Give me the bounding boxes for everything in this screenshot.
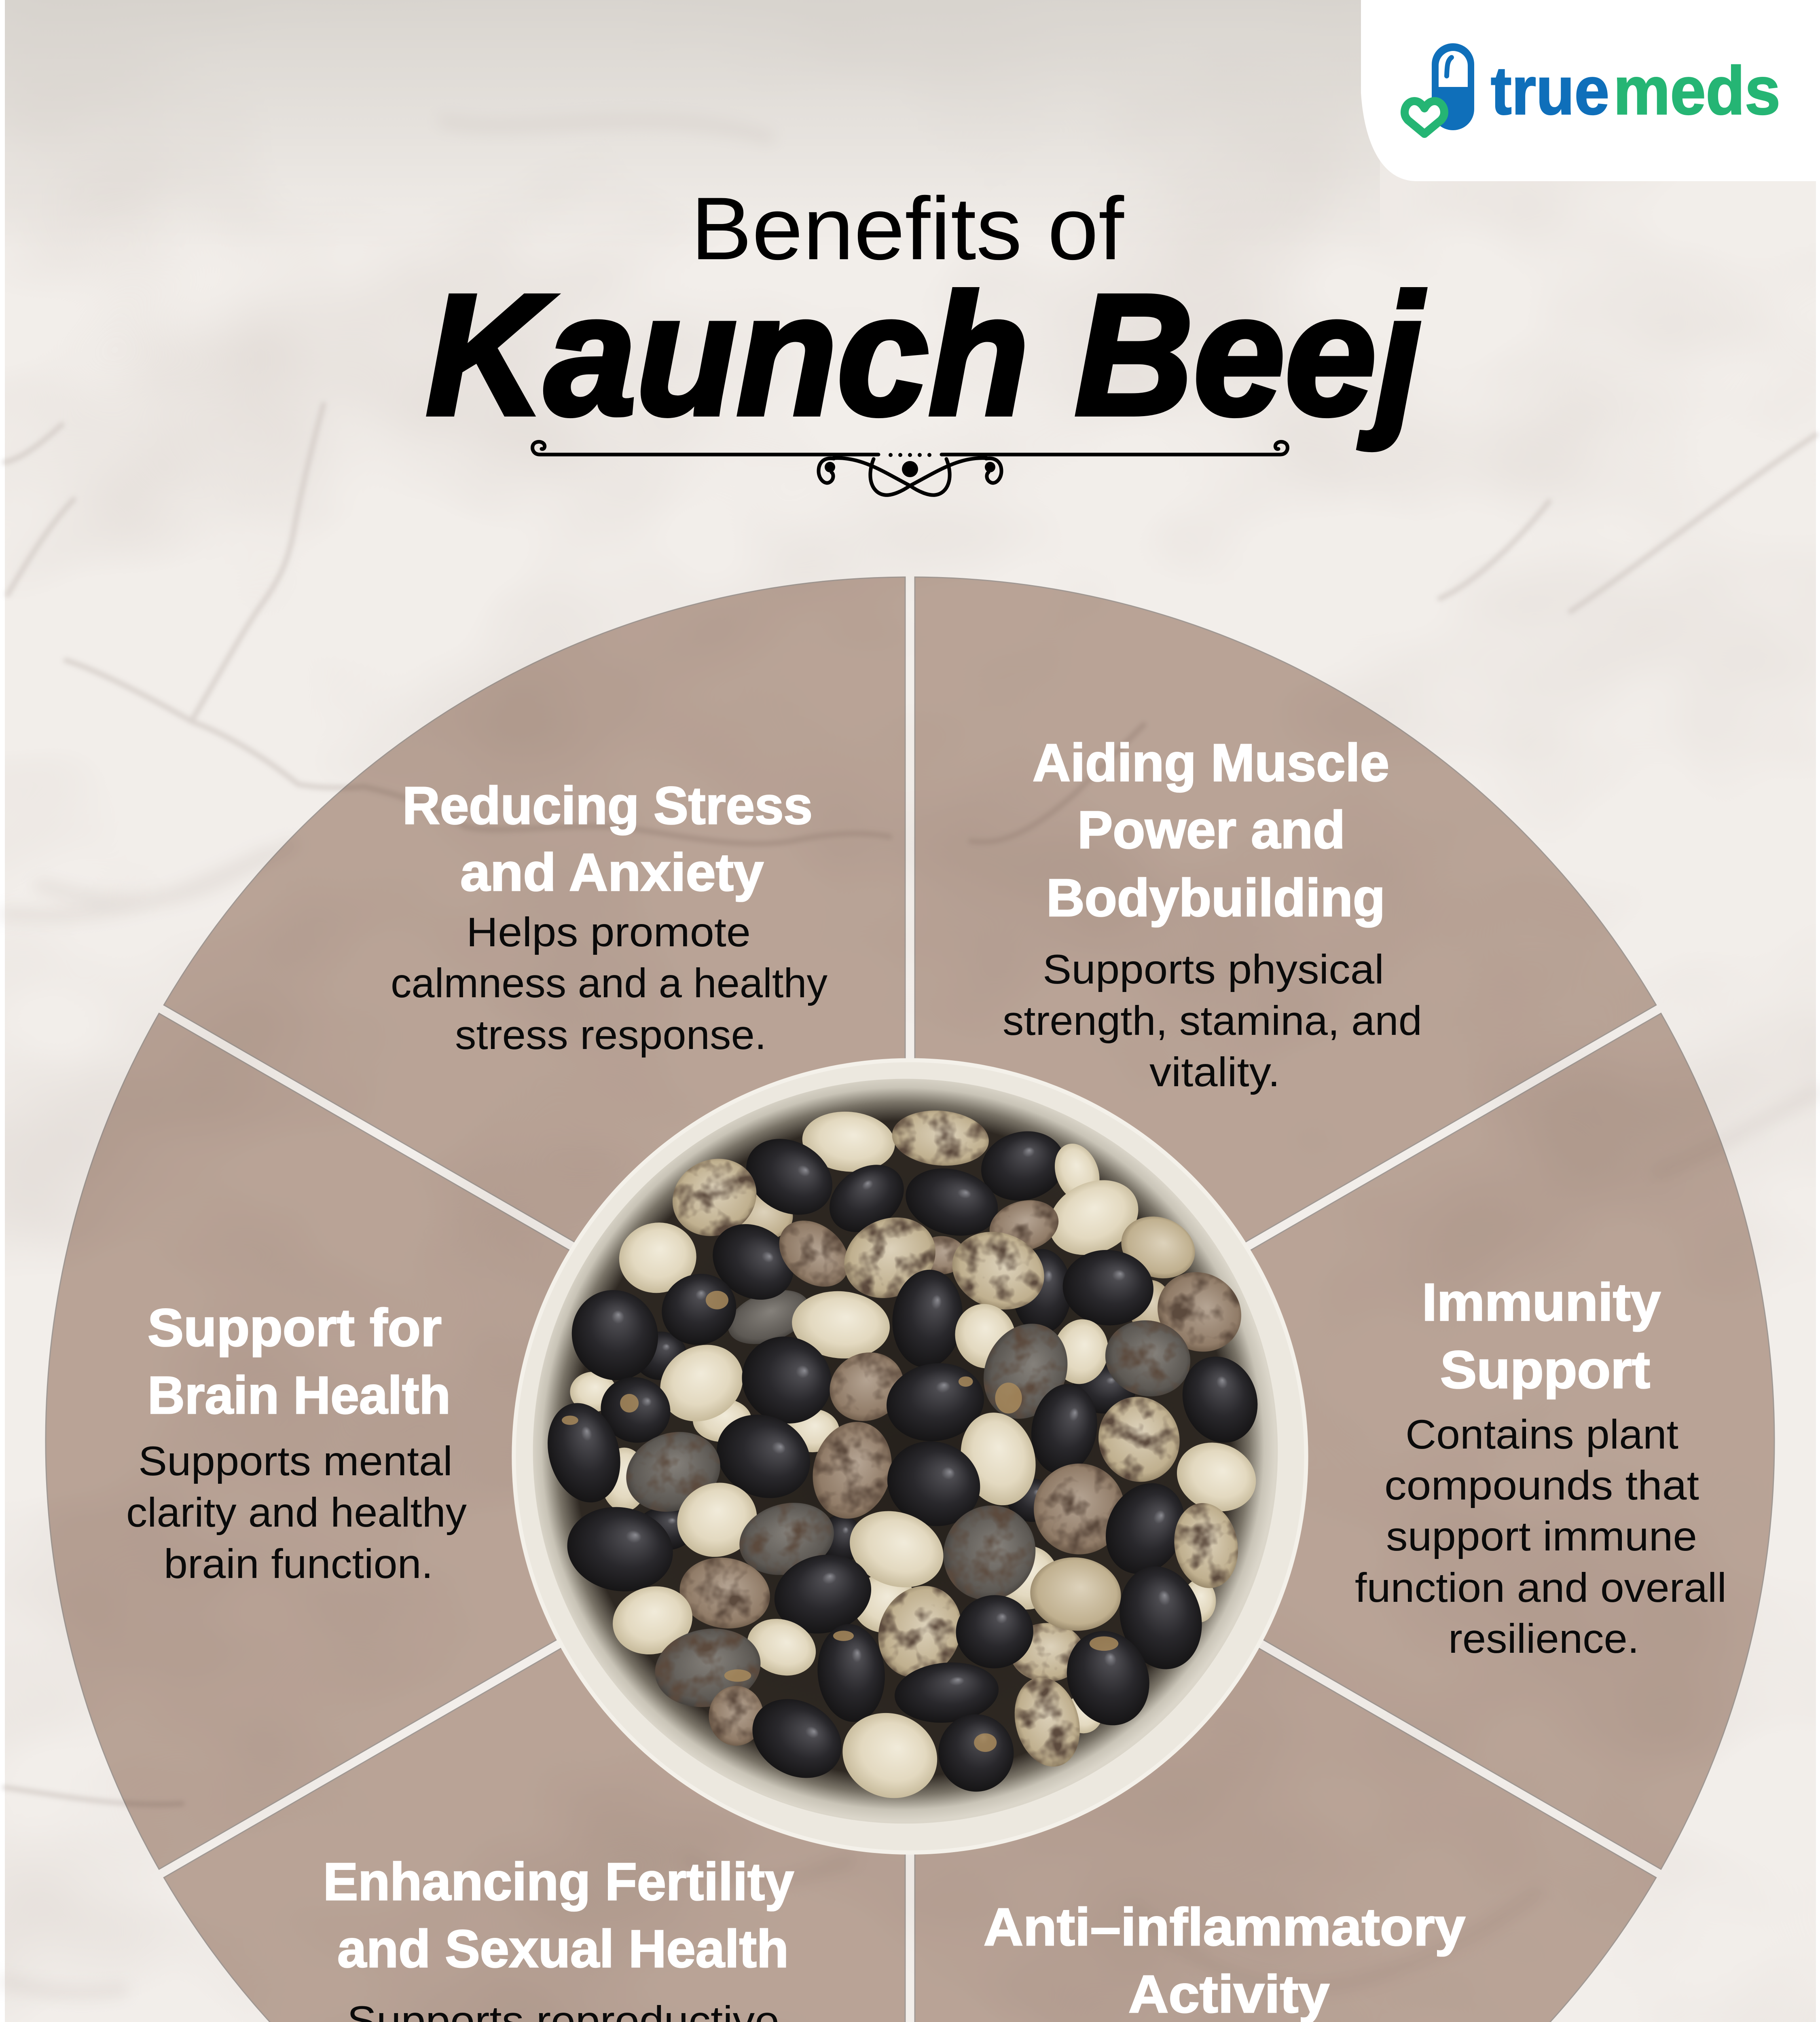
logo wordmark — [1491, 53, 1780, 129]
text: immunity support — [1355, 1272, 1727, 1662]
sector: top right — [915, 577, 1656, 1433]
text: immunity support: Immunity — [1422, 1272, 1661, 1332]
text: immunity support: function and overall — [1355, 1565, 1727, 1611]
wheel of six sectors — [46, 577, 1774, 2022]
text: reducing stress: Reducing Stress — [402, 776, 813, 835]
beans, back layer — [570, 1192, 1216, 1733]
text: fertility: Enhancing Fertility — [323, 1852, 794, 1911]
sector: top left — [164, 577, 905, 1433]
text: anti-inflammatory — [984, 1897, 1465, 2022]
title: Benefits of — [691, 179, 1124, 278]
text: brain health: clarity and healthy — [126, 1489, 467, 1536]
logo wordmark: meds — [1613, 53, 1780, 129]
text: anti-inflammatory: Anti–inflammatory — [984, 1897, 1465, 1956]
text: immunity support: Contains plant — [1405, 1411, 1678, 1457]
text: brain health — [126, 1298, 467, 1587]
text: reducing stress — [391, 776, 827, 1058]
text: aiding muscle power: vitality. — [1149, 1049, 1280, 1095]
text: immunity support: compounds that — [1384, 1462, 1699, 1508]
text: reducing stress: calmness and a healthy — [391, 960, 827, 1006]
sector: bottom right — [915, 1450, 1656, 2022]
text: reducing stress: stress response. — [455, 1012, 766, 1058]
text: aiding muscle power: Power and — [1077, 800, 1345, 859]
sector: right — [920, 1013, 1774, 1869]
bowl of beans — [513, 1059, 1307, 1853]
sector: bottom left — [164, 1450, 905, 2022]
text: immunity support: Support — [1440, 1340, 1650, 1399]
text: anti-inflammatory: Activity — [1128, 1964, 1329, 2022]
text: aiding muscle power: Aiding Muscle — [1033, 733, 1389, 792]
logo wordmark: true — [1491, 53, 1609, 129]
text: brain health: brain function. — [164, 1541, 433, 1587]
tan patches on dark beans — [562, 1291, 1118, 1752]
title — [426, 179, 1425, 452]
text: aiding muscle power: Supports physical — [1043, 946, 1384, 992]
text: fertility: and Sexual Health — [337, 1919, 789, 1978]
text: immunity support: support immune — [1386, 1513, 1697, 1559]
sector: left — [46, 1013, 900, 1869]
text: immunity support: resilience. — [1448, 1616, 1639, 1662]
panel: logo card — [1361, 0, 1820, 181]
title: Kaunch Beej — [426, 259, 1425, 452]
text: brain health: Brain Health — [148, 1365, 451, 1425]
text: brain health: Support for — [148, 1298, 442, 1357]
ornament divider — [533, 442, 1287, 495]
beans, front layer — [537, 1106, 1270, 1811]
text: reducing stress: and Anxiety — [460, 842, 764, 902]
text: reducing stress: Helps promote — [466, 909, 751, 955]
icon: heart — [1405, 101, 1444, 134]
text: brain health: Supports mental — [138, 1438, 453, 1484]
text: aiding muscle power: strength, stamina, and — [1003, 998, 1422, 1044]
text: aiding muscle power — [1003, 733, 1422, 1095]
text: fertility — [323, 1852, 794, 2022]
icon: capsule — [1432, 43, 1474, 130]
text: aiding muscle power: Bodybuilding — [1046, 868, 1385, 927]
